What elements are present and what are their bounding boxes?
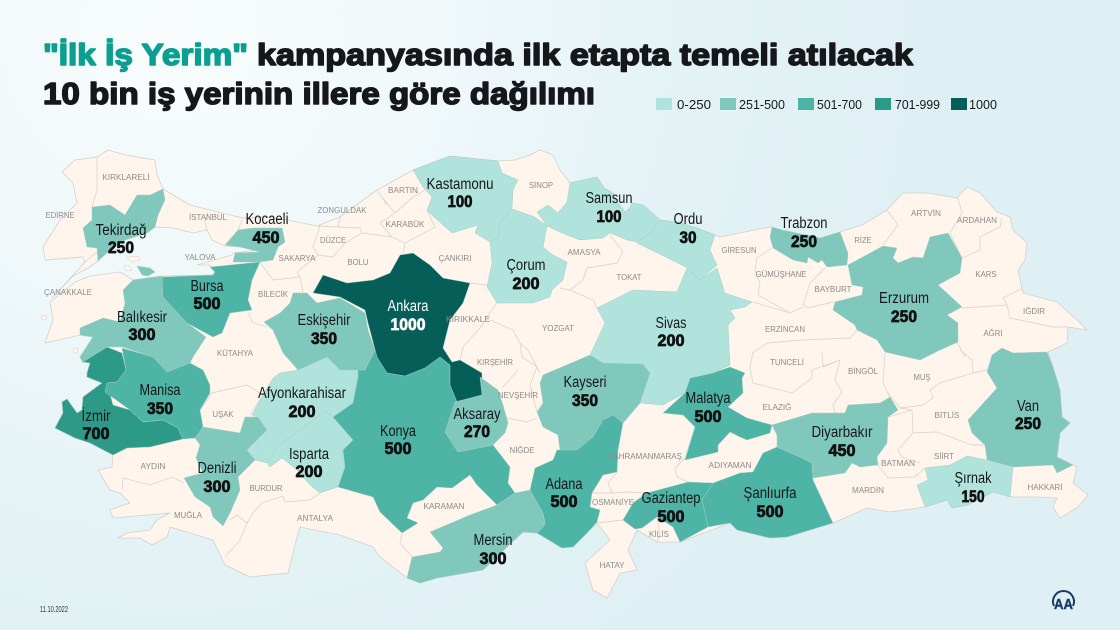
map: grey province names: SİİRT xyxy=(934,452,954,461)
title: 10 bin iş yerinin illere göre dağılımı xyxy=(43,76,595,111)
province: Şırnak xyxy=(917,456,1013,508)
map: grey province names: KARABÜK xyxy=(386,220,425,229)
map: grey province names: AMASYA xyxy=(568,248,601,257)
map: grey province names: ERZİNCAN xyxy=(765,325,805,334)
map: grey province names: EDİRNE xyxy=(46,211,74,220)
label: Adana 500: Adana xyxy=(546,476,583,493)
label: Van 250: 250 xyxy=(1015,415,1041,433)
map: grey province names: ÇANKIRI xyxy=(438,254,472,263)
province: Adana xyxy=(530,415,623,548)
label: Erzurum 250 xyxy=(879,290,929,326)
icon: AA logo: AA xyxy=(1054,596,1073,613)
map: grey province names: DÜZCE xyxy=(320,236,346,245)
label: Şanlıurfa 500: Şanlıurfa xyxy=(744,485,797,502)
label: Kocaeli 450: Kocaeli xyxy=(246,211,288,228)
label: Konya 500: Konya xyxy=(380,423,416,440)
label: Tekirdağ 250 xyxy=(96,222,146,257)
label: Erzurum 250: Erzurum xyxy=(879,290,929,307)
map: grey province names: MUŞ xyxy=(914,373,930,382)
map: grey province names: AĞRI xyxy=(984,329,1002,338)
label: Eskişehir 350: Eskişehir xyxy=(298,312,350,329)
map: grey province names: İSTANBUL xyxy=(189,213,228,222)
label: Ordu 30: Ordu xyxy=(674,211,702,228)
map: grey province names: NEVŞEHİR xyxy=(498,391,538,400)
map: grey province names: RİZE xyxy=(854,236,872,245)
province: Sivas xyxy=(590,268,752,405)
legend: 1000 xyxy=(969,97,997,112)
label: Mersin 300: 300 xyxy=(480,550,506,568)
province: İzmir xyxy=(55,347,183,455)
label: Kastamonu 100: Kastamonu xyxy=(426,176,494,193)
label: Konya 500: 500 xyxy=(384,440,412,458)
province: Bursa xyxy=(162,262,260,337)
province: Çorum xyxy=(487,209,567,303)
map: grey province names: SİNOP xyxy=(529,181,553,190)
label: Aksaray 270 xyxy=(454,406,501,441)
label: İzmir 700: İzmir xyxy=(82,407,110,425)
title xyxy=(43,37,914,111)
label: Mersin 300 xyxy=(474,532,512,568)
label: Afyonkarahisar 200: Afyonkarahisar xyxy=(258,385,346,402)
map: grey province names: BOLU xyxy=(348,258,369,267)
label: Isparta 200: 200 xyxy=(296,463,322,481)
label: Isparta 200: Isparta xyxy=(289,446,329,463)
label: Ankara 1000 xyxy=(388,298,429,334)
province: Aksaray xyxy=(445,377,508,452)
map: grey province names: ELAZIĞ xyxy=(762,403,792,412)
province: Erzurum xyxy=(833,233,962,360)
province: Konya xyxy=(333,350,515,533)
map: grey province names: SAKARYA xyxy=(278,254,316,263)
province: Şanlıurfa xyxy=(702,447,833,538)
label: Ankara 1000: 1000 xyxy=(390,316,426,334)
label: Malatya 500 xyxy=(686,390,731,426)
label: Gaziantep 500: Gaziantep xyxy=(642,490,700,507)
province: Van xyxy=(968,348,1073,473)
label: Kastamonu 100 xyxy=(426,176,494,211)
label: Ankara 1000: Ankara xyxy=(388,298,429,315)
label: Balıkesir 300 xyxy=(117,309,167,344)
label: Şanlıurfa 500 xyxy=(744,485,797,521)
map: grey province names: KÜTAHYA xyxy=(217,349,254,358)
label: Manisa 350: Manisa xyxy=(140,382,181,399)
title: "İlk İş Yerim" xyxy=(43,37,248,72)
map: coloured provinces xyxy=(55,156,1073,583)
map: grey province names: MARDİN xyxy=(852,486,884,495)
map: grey province names: OSMANİYE xyxy=(592,498,634,507)
label: Sivas 200: Sivas xyxy=(656,315,687,332)
label: Kocaeli 450 xyxy=(246,211,288,247)
province: Diyarbakır xyxy=(772,397,898,478)
label: Manisa 350 xyxy=(140,382,181,418)
map: grey province names: TOKAT xyxy=(616,273,642,282)
map: grey province names: BATMAN xyxy=(881,459,915,468)
province: Balıkesir xyxy=(80,276,206,372)
map: grey province names: BAYBURT xyxy=(814,285,852,294)
label: Aksaray 270: Aksaray xyxy=(454,406,501,423)
map: grey province names: IĞDIR xyxy=(1023,307,1045,316)
legend: 701-999 xyxy=(895,97,940,112)
island: Balıkesir xyxy=(137,266,155,276)
label: Bursa 500 xyxy=(190,278,224,313)
map: grey province names: KIRIKKALE xyxy=(446,315,490,324)
label: Afyonkarahisar 200: 200 xyxy=(288,403,316,421)
province: Malatya xyxy=(663,367,772,460)
map: grey province names: BİNGÖL xyxy=(848,367,879,376)
label: Diyarbakır 450: Diyarbakır xyxy=(812,424,872,441)
legend: 0-250 xyxy=(677,97,711,112)
title: kampanyasında ilk etapta temeli atılacak xyxy=(257,37,914,72)
map: grey province names: BİTLİS xyxy=(934,411,960,420)
map: grey province names: GÜMÜŞHANE xyxy=(756,270,806,279)
label: Gaziantep 500 xyxy=(642,490,700,526)
province: Kayseri xyxy=(537,355,650,450)
map: grey province names: ARTVİN xyxy=(911,209,941,218)
map: grey province names: TUNCELİ xyxy=(770,358,804,367)
label: Kastamonu 100: 100 xyxy=(448,193,472,211)
map: grey province names: BİLECİK xyxy=(258,290,289,299)
map: grey province names: ARDAHAN xyxy=(957,216,997,225)
date: 11.10.2022 xyxy=(40,605,68,614)
map: grey province names: MUĞLA xyxy=(174,511,203,520)
label: Balıkesir 300: 300 xyxy=(128,326,156,344)
label: Adana 500 xyxy=(546,476,583,511)
map: grey province names: YOZGAT xyxy=(542,324,574,333)
province: Trabzon xyxy=(770,227,848,267)
legend: 251-500 xyxy=(739,97,785,112)
province: Isparta xyxy=(267,411,353,493)
label: Erzurum 250: 250 xyxy=(891,308,917,326)
label: Van 250: Van xyxy=(1017,398,1039,415)
label: Sivas 200 xyxy=(656,315,687,350)
label: Malatya 500: Malatya xyxy=(686,390,731,407)
label: Sivas 200: 200 xyxy=(658,332,684,350)
label: Trabzon 250: 250 xyxy=(791,233,817,251)
label: Malatya 500: 500 xyxy=(694,408,722,426)
label: Aksaray 270: 270 xyxy=(464,423,490,441)
map: grey province names: KIRŞEHİR xyxy=(477,358,513,367)
province: Kastamonu xyxy=(413,156,518,242)
map: grey province names: UŞAK xyxy=(212,410,234,419)
label: Mersin 300: Mersin xyxy=(474,532,512,549)
label: Van 250 xyxy=(1015,398,1041,433)
label: Gaziantep 500: 500 xyxy=(658,508,684,526)
label: Kayseri 350: Kayseri xyxy=(564,374,606,391)
label: İzmir 700: 700 xyxy=(82,425,110,443)
label: Denizli 300: 300 xyxy=(204,478,230,496)
label: Manisa 350: 350 xyxy=(147,400,173,418)
label: Şanlıurfa 500: 500 xyxy=(756,503,784,521)
label: Çorum 200: 200 xyxy=(512,275,540,293)
map: Turkey base silhouette xyxy=(41,150,1088,598)
map: grey province names: KARAMAN xyxy=(424,502,465,511)
province: Tekirdağ xyxy=(83,189,165,261)
label: Konya 500 xyxy=(380,423,416,458)
map: grey province names: BURDUR xyxy=(250,484,283,493)
label: Bursa 500: Bursa xyxy=(190,278,224,295)
label: Adana 500: 500 xyxy=(550,493,578,511)
map: grey province names: AYDIN xyxy=(140,462,166,471)
label: Samsun 100 xyxy=(586,190,632,226)
label: Trabzon 250: Trabzon xyxy=(780,215,828,232)
map: grey province names: ÇANAKKALE xyxy=(44,288,92,297)
province: Manisa xyxy=(105,348,210,439)
province: Ordu xyxy=(637,220,717,280)
label: Denizli 300: Denizli xyxy=(198,460,236,477)
label: Bursa 500: 500 xyxy=(194,295,220,313)
label: Şırnak 150 xyxy=(954,470,992,506)
map: grey province names: HATAY xyxy=(600,561,625,570)
legend: 501-700 xyxy=(817,97,862,112)
label: Tekirdağ 250: 250 xyxy=(108,239,134,257)
label: Şırnak 150: Şırnak xyxy=(954,470,992,487)
map: grey province names xyxy=(44,173,1062,570)
label: Eskişehir 350: 350 xyxy=(311,330,337,348)
label: Şırnak 150: 150 xyxy=(962,488,984,506)
legend xyxy=(656,97,997,112)
label: Diyarbakır 450 xyxy=(812,424,872,460)
map: grey province names: KİLİS xyxy=(649,530,669,539)
map: grey province names: ADIYAMAN xyxy=(708,461,752,470)
label: Trabzon 250 xyxy=(780,215,828,251)
map: grey province names: KARS xyxy=(976,270,996,279)
label: Denizli 300 xyxy=(198,460,236,496)
map: grey province names: KAHRAMANMARAŞ xyxy=(608,452,682,461)
icon: AA logo xyxy=(1053,591,1074,613)
label: Çorum 200: Çorum xyxy=(506,257,546,274)
label: Balıkesir 300: Balıkesir xyxy=(117,309,167,326)
label: İzmir 700 xyxy=(82,407,110,443)
map: grey province names: NİĞDE xyxy=(510,446,534,455)
map: grey province names: HAKKARİ xyxy=(1028,483,1062,492)
province: Gaziantep xyxy=(623,482,713,542)
map: grey province names: GİRESUN xyxy=(722,246,757,255)
label: Ordu 30: 30 xyxy=(680,229,696,247)
label: Afyonkarahisar 200 xyxy=(258,385,346,421)
map: grey province names: KIRKLARELİ xyxy=(102,173,150,182)
label: Ordu 30 xyxy=(674,211,702,247)
label: Samsun 100: 100 xyxy=(596,208,622,226)
label: Kayseri 350: 350 xyxy=(572,392,598,410)
label: Diyarbakır 450: 450 xyxy=(828,442,856,460)
map: grey province names: YALOVA xyxy=(184,253,216,262)
label: Isparta 200 xyxy=(289,446,329,481)
map: grey province names: ANTALYA xyxy=(297,514,334,523)
label: Eskişehir 350 xyxy=(298,312,350,348)
label: Kocaeli 450: 450 xyxy=(252,229,280,247)
map: grey province names: ZONGULDAK xyxy=(318,206,367,215)
label: Çorum 200 xyxy=(506,257,546,293)
map: value labels xyxy=(82,176,1041,568)
map: internal province boundaries xyxy=(45,158,1068,557)
province: Afyonkarahisar xyxy=(247,357,358,463)
province: Denizli xyxy=(184,417,267,526)
label: Kayseri 350 xyxy=(564,374,606,410)
map: grey province names: BARTIN xyxy=(388,186,418,195)
province: Samsun xyxy=(537,177,660,242)
label: Samsun 100: Samsun xyxy=(586,190,632,207)
province: Mersin xyxy=(407,490,545,583)
province: Eskişehir xyxy=(264,293,375,370)
label: Tekirdağ 250: Tekirdağ xyxy=(96,222,146,239)
province: Ankara xyxy=(313,253,482,402)
province: Kocaeli xyxy=(225,228,285,262)
